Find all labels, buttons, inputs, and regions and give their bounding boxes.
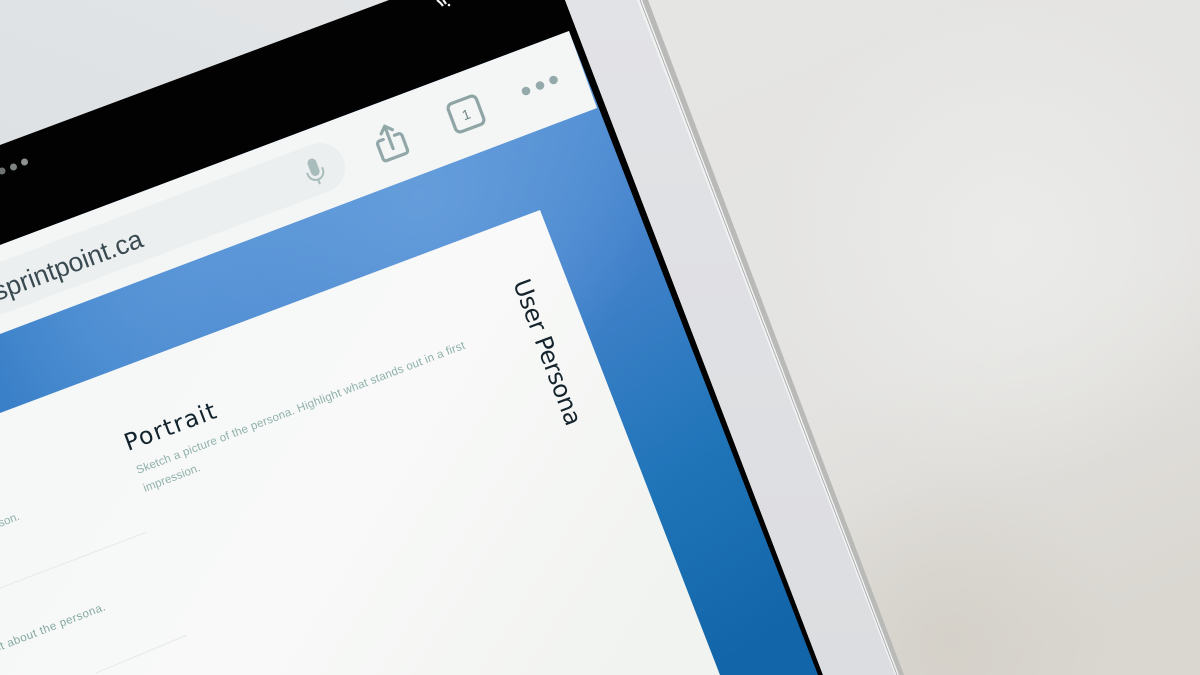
heading: user persona: User Persona [507, 275, 588, 429]
icon: share [372, 122, 408, 162]
browser toolbar [0, 31, 597, 334]
icon: microphone [303, 156, 327, 187]
icon: more menu dots [522, 76, 558, 95]
portrait description: Sketch a picture of the persona. Highlight what stands out in a first [135, 340, 468, 477]
persona template page [0, 210, 720, 675]
portrait description: impression. [142, 462, 202, 495]
icon: tab count: 1 [460, 106, 473, 123]
icon: tab count [447, 95, 485, 133]
tablet bezel: top left [0, 0, 400, 150]
address bar pill [0, 143, 345, 315]
screen: blue page background [0, 31, 818, 675]
tablet metal edge [637, 0, 904, 675]
tablet bezel: right side [565, 0, 897, 675]
icon: status dots [0, 158, 28, 174]
section title: portrait: Portrait [120, 397, 220, 457]
icon: wifi status [437, 0, 450, 6]
table surface [640, 0, 1200, 675]
tablet black screen border [0, 0, 823, 675]
